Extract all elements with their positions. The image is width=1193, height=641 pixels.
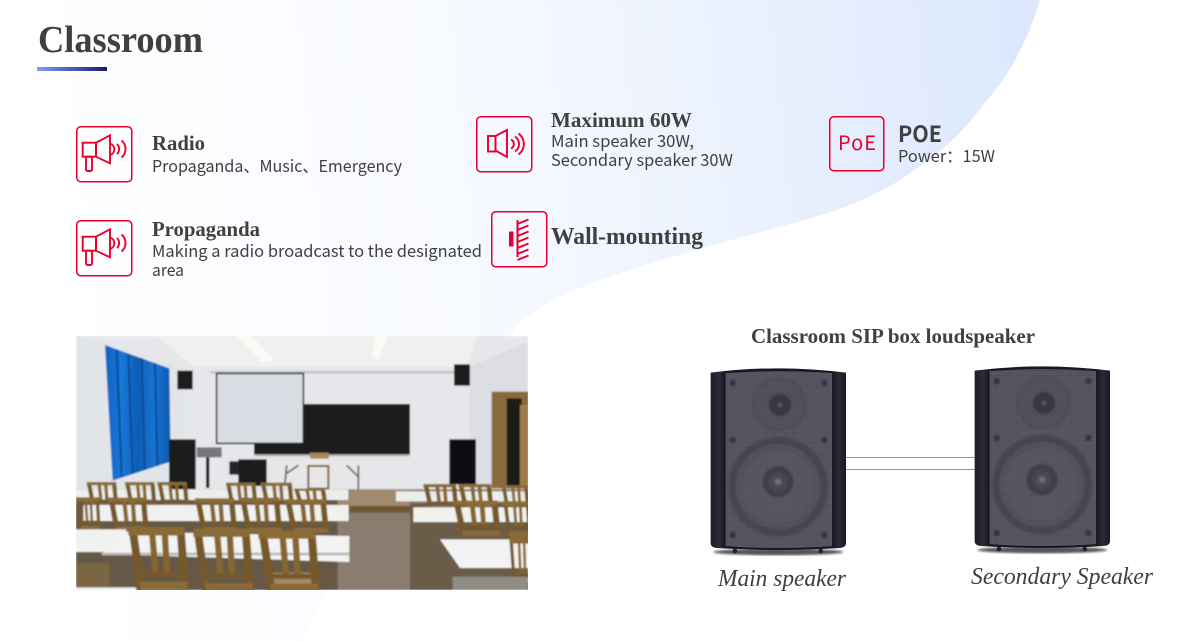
POE description: Power：15W [898,143,995,167]
propaganda description: area [152,257,184,281]
icon: megaphone [77,127,132,182]
product heading: Classroom SIP box loudspeaker [751,324,1035,348]
icon: speaker [477,117,532,172]
wall-mounting heading: Wall-mounting [551,224,703,250]
title: Classroom [38,19,203,61]
POE heading: POE [898,117,942,149]
radio heading: Radio [152,131,205,155]
feature: POE [830,117,995,171]
title underline [37,67,107,71]
main speaker label: Main speaker [717,565,846,592]
feature: maximum 60W [477,108,733,172]
propaganda heading: Propaganda [152,217,260,241]
icon: PoE [830,117,884,171]
speaker diagram [711,366,1110,555]
main speaker [711,368,846,555]
secondary speaker [975,366,1110,553]
icon: wall mount [492,212,547,267]
feature: radio [77,127,402,182]
feature: propaganda [77,217,482,281]
connecting wires [846,458,975,470]
radio description: Propaganda、Music、Emergency [152,153,402,177]
secondary speaker label: Secondary Speaker [971,563,1153,590]
maximum heading: Maximum 60W [551,108,692,132]
icon: PoE: PoE [838,127,876,156]
maximum description: Secondary speaker 30W [551,147,733,171]
icon: megaphone [77,221,132,276]
propaganda description: Making a radio broadcast to the designated [152,238,482,262]
feature: wall-mounting [492,212,703,267]
maximum description: Main speaker 30W, [551,128,694,152]
photo: classroom [76,336,534,592]
